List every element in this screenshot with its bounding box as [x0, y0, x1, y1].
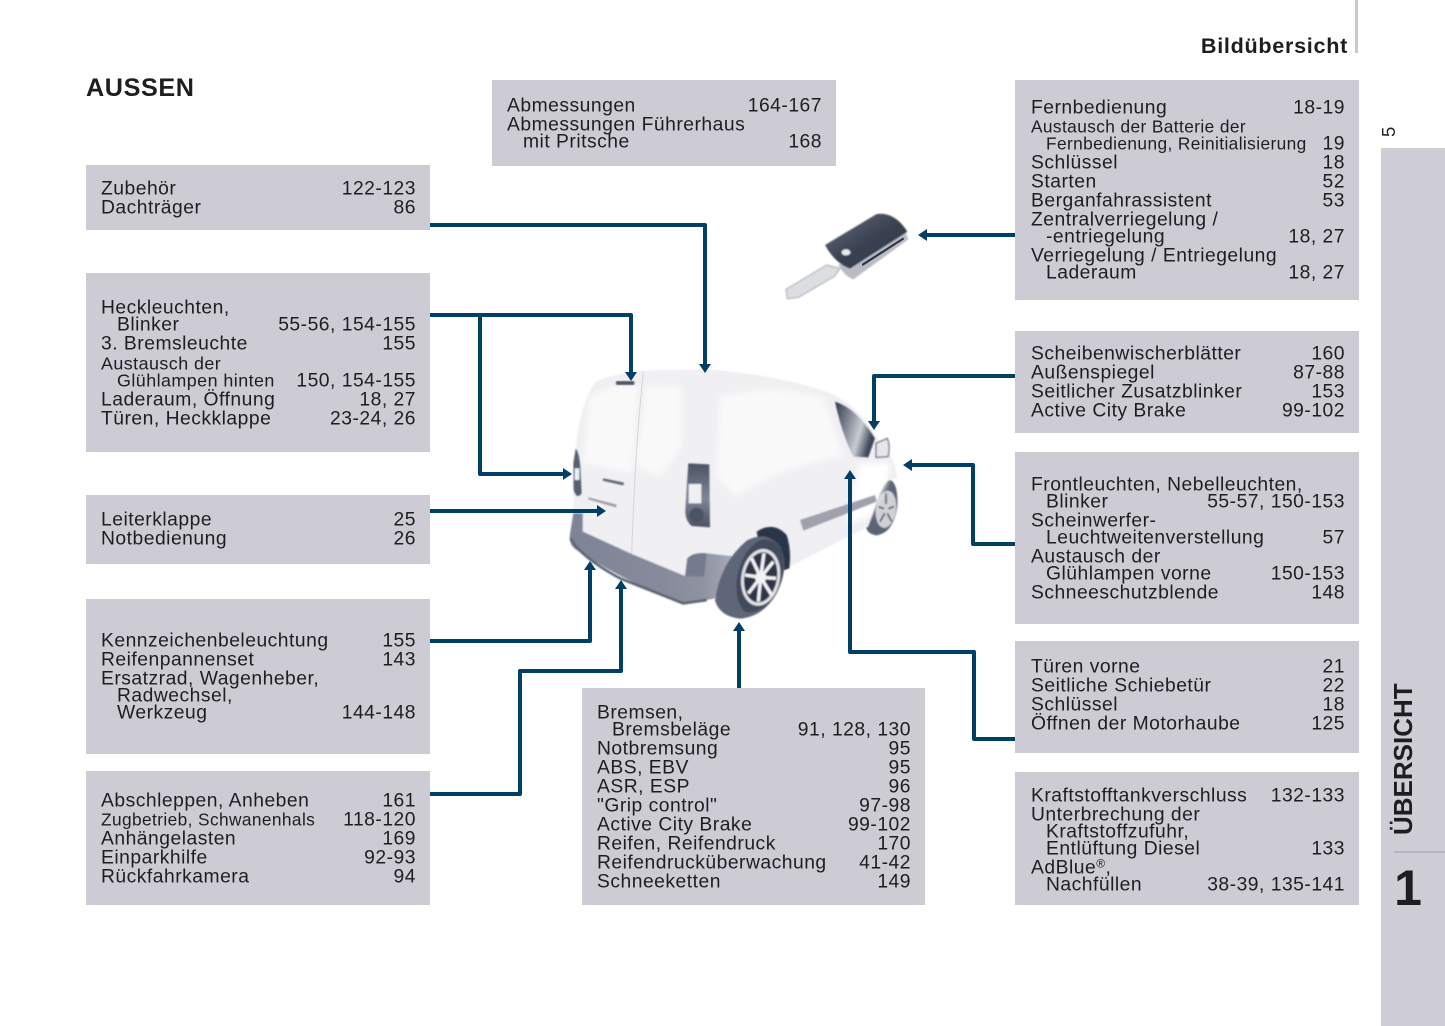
entries: Fernbedienung — [1031, 98, 1167, 119]
entries: 18, 27 — [359, 390, 416, 411]
entries: 41-42 — [859, 853, 911, 874]
entries: , — [1106, 858, 1111, 879]
entries: 150, 154-155 — [296, 371, 416, 392]
entries: "Grip control" — [597, 796, 717, 817]
entries: 18 — [1323, 153, 1345, 174]
entries: 26 — [394, 529, 416, 550]
key slot — [862, 237, 904, 266]
panel background — [86, 495, 430, 564]
entries: 86 — [394, 198, 416, 219]
tab label: ÜBERSICHT — [1388, 683, 1418, 835]
entries: Zentralverriegelung / — [1031, 210, 1218, 231]
entries: 94 — [394, 867, 416, 888]
entries: Unterbrechung der — [1031, 805, 1200, 826]
entries: 160 — [1311, 344, 1345, 365]
entries: ABS, EBV — [597, 758, 689, 779]
entries: Schneeschutzblende — [1031, 583, 1219, 604]
panel: wipers and mirrors — [1015, 331, 1359, 433]
entries: Abschleppen, Anheben — [101, 791, 309, 812]
entries: 99-102 — [848, 815, 911, 836]
entries: 3. Bremsleuchte — [101, 334, 248, 355]
key fob silver edge — [838, 232, 908, 279]
entries — [1031, 657, 1345, 735]
page number: 5 — [1378, 127, 1399, 137]
entries: 95 — [889, 758, 911, 779]
entries: 22 — [1323, 676, 1345, 697]
entries: 19 — [1323, 134, 1345, 155]
entries: Blinker — [1046, 492, 1109, 513]
entries — [101, 179, 416, 219]
entries: Kraftstofftankverschluss — [1031, 786, 1247, 807]
entries: 23-24, 26 — [330, 409, 416, 430]
panel background — [492, 80, 836, 166]
entries: Laderaum — [1046, 263, 1137, 284]
entries: Außenspiegel — [1031, 363, 1155, 384]
front wheel — [866, 479, 898, 535]
entries: Radwechsel, — [117, 686, 233, 707]
entries: Verriegelung / Entriegelung — [1031, 246, 1277, 267]
entries: 150-153 — [1271, 564, 1345, 585]
arrow: doors — [844, 470, 1015, 739]
entries: Scheinwerfer- — [1031, 511, 1156, 532]
entries: 170 — [877, 834, 911, 855]
entries — [101, 510, 416, 550]
panel: towing — [86, 771, 430, 905]
entries: 153 — [1311, 382, 1345, 403]
entries — [1031, 344, 1345, 422]
key button — [841, 249, 851, 256]
ladder flap latch — [588, 497, 617, 507]
plate light — [616, 381, 634, 385]
entries: 168 — [788, 132, 822, 153]
entries — [101, 791, 416, 888]
entries: Entlüftung Diesel — [1046, 839, 1200, 860]
entries — [101, 631, 416, 724]
entries: Fernbedienung, Reinitialisierung — [1046, 134, 1307, 154]
entries: Schneeketten — [597, 872, 721, 893]
rear left light — [573, 449, 582, 496]
entries: 155 — [382, 334, 416, 355]
chapter tab — [1381, 148, 1445, 1026]
entries: 87-88 — [1293, 363, 1345, 384]
van body — [573, 369, 897, 577]
entries: 25 — [394, 510, 416, 531]
entries: 118-120 — [343, 810, 416, 831]
entries: Abmessungen Führerhaus — [507, 115, 745, 136]
panel: ladder flap — [86, 495, 430, 564]
entries: Türen, Heckklappe — [101, 409, 271, 430]
entries: Heckleuchten, — [101, 298, 230, 319]
entries: 95 — [889, 739, 911, 760]
entries: Blinker — [117, 315, 180, 336]
entries: Schlüssel — [1031, 153, 1118, 174]
panel background — [1015, 331, 1359, 433]
entries: 144-148 — [342, 703, 416, 724]
panel background — [86, 771, 430, 905]
entries: 55-56, 154-155 — [278, 315, 416, 336]
arrow: wipers and mirrors — [868, 376, 1015, 430]
panel background — [86, 165, 430, 230]
entries: Einparkhilfe — [101, 848, 208, 869]
entries: 18, 27 — [1288, 263, 1345, 284]
entries — [101, 298, 416, 430]
arrow: rear lights to plate light and tail light — [430, 315, 637, 480]
key blade — [786, 265, 840, 299]
entries: Starten — [1031, 172, 1097, 193]
entries: Leiterklappe — [101, 510, 212, 531]
panel: accessories — [86, 165, 430, 230]
entries: Austausch der — [1031, 547, 1161, 568]
entries — [1031, 786, 1345, 896]
entries: 133 — [1311, 839, 1345, 860]
entries: Glühlampen vorne — [1046, 564, 1212, 585]
arrow: ladder flap — [430, 505, 606, 517]
entries: Zugbetrieb, Schwanenhals — [101, 810, 315, 830]
entries: Bremsbeläge — [612, 720, 731, 741]
panel background — [582, 688, 925, 905]
entries: 148 — [1311, 583, 1345, 604]
arrow: accessories to roof — [430, 225, 711, 373]
entries: 57 — [1323, 528, 1345, 549]
chapter number: 1 — [1394, 860, 1422, 916]
entries: -entriegelung — [1046, 227, 1165, 248]
entries: 97-98 — [859, 796, 911, 817]
entries: 18 — [1323, 695, 1345, 716]
entries: Dachträger — [101, 198, 201, 219]
entries: Glühlampen hinten — [117, 371, 275, 391]
entries: 143 — [382, 650, 416, 671]
entries: 52 — [1323, 172, 1345, 193]
arrow: brakes — [733, 622, 745, 688]
entries: ASR, ESP — [597, 777, 690, 798]
entries — [597, 703, 911, 893]
panel: remote control and key — [1015, 80, 1359, 300]
entries — [1031, 475, 1345, 604]
entries: Bremsen, — [597, 703, 684, 724]
header rule — [1355, 0, 1358, 53]
entries: Kennzeichenbeleuchtung — [101, 631, 329, 652]
rear wheel — [715, 527, 790, 619]
panel: rear lights — [86, 273, 430, 452]
tab background — [1381, 148, 1445, 1026]
arrow: licence plate light — [430, 561, 596, 641]
tab divider — [1394, 851, 1445, 853]
rear side light — [685, 463, 710, 527]
title: AUSSEN: AUSSEN — [86, 74, 195, 102]
entries: Reifenpannenset — [101, 650, 254, 671]
panel background — [1015, 641, 1359, 753]
entries: 38-39, 135-141 — [1207, 875, 1345, 896]
entries: Schlüssel — [1031, 695, 1118, 716]
entries: 149 — [877, 872, 911, 893]
entries: 55-57, 150-153 — [1207, 492, 1345, 513]
entries: 18, 27 — [1288, 227, 1345, 248]
panel background — [1015, 772, 1359, 905]
arrow: key — [918, 229, 1015, 241]
entries: 91, 128, 130 — [798, 720, 911, 741]
illustration: van — [570, 369, 898, 619]
key fob — [825, 214, 907, 268]
entries: Ersatzrad, Wagenheber, — [101, 669, 319, 690]
entries: Leuchtweitenverstellung — [1046, 528, 1264, 549]
entries: Laderaum, Öffnung — [101, 389, 275, 411]
entries: Reifen, Reifendruck — [597, 834, 776, 855]
wing mirror — [876, 438, 889, 457]
entries: Active City Brake — [1031, 401, 1186, 422]
entries: Scheibenwischerblätter — [1031, 344, 1241, 365]
panel background — [1015, 80, 1359, 300]
rear bumper — [570, 513, 736, 604]
entries: Notbedienung — [101, 529, 227, 550]
entries: 122-123 — [342, 179, 416, 200]
entries: 96 — [889, 777, 911, 798]
entries: Rückfahrkamera — [101, 867, 249, 888]
entries — [1031, 98, 1345, 284]
entries: Active City Brake — [597, 815, 752, 836]
rear door handle — [603, 478, 624, 485]
panel: front lights — [1015, 452, 1359, 624]
entries: 99-102 — [1282, 401, 1345, 422]
entries: 18-19 — [1293, 98, 1345, 119]
entries: Türen vorne — [1031, 657, 1140, 678]
entries: AdBlue — [1031, 858, 1096, 879]
side rubbing strip — [800, 495, 877, 531]
entries: mit Pritsche — [523, 132, 630, 153]
panel background — [1015, 452, 1359, 624]
entries: Öffnen der Motorhaube — [1031, 713, 1241, 735]
panel: fuel — [1015, 772, 1359, 905]
entries: Reifendrucküberwachung — [597, 853, 827, 874]
door seams — [632, 372, 643, 555]
illustration: key — [786, 214, 908, 299]
entries: Austausch der Batterie der — [1031, 117, 1246, 137]
page header: Bildübersicht: Bildübersicht — [1201, 33, 1348, 58]
entries: ® — [1096, 857, 1106, 871]
body highlights — [583, 385, 890, 523]
entries: Anhängelasten — [101, 829, 236, 850]
entries: Austausch der — [101, 354, 221, 374]
entries: Abmessungen — [507, 96, 636, 117]
entries: Zubehör — [101, 179, 176, 200]
entries: 161 — [382, 791, 416, 812]
entries: Kraftstoffzufuhr, — [1046, 822, 1189, 843]
panel background — [86, 599, 430, 754]
panel: licence plate light and spare wheel — [86, 599, 430, 754]
panel: doors — [1015, 641, 1359, 753]
panel: dimensions — [492, 80, 836, 166]
entries: 125 — [1311, 714, 1345, 735]
entries: Seitlicher Zusatzblinker — [1031, 382, 1242, 403]
arrow: front lights — [903, 459, 1015, 544]
entries: Frontleuchten, Nebelleuchten, — [1031, 475, 1303, 496]
entries: 21 — [1323, 657, 1345, 678]
entries: Notbremsung — [597, 739, 718, 760]
entries: 132-133 — [1271, 786, 1345, 807]
entries: 155 — [382, 631, 416, 652]
entries: 53 — [1323, 191, 1345, 212]
panel background — [86, 273, 430, 452]
entries: Werkzeug — [117, 703, 207, 724]
entries: 92-93 — [364, 848, 416, 869]
entries: 169 — [382, 829, 416, 850]
panel: brakes and tyres — [582, 688, 925, 905]
entries: Nachfüllen — [1046, 875, 1142, 896]
arrow: towing — [430, 580, 627, 794]
entries: Seitliche Schiebetür — [1031, 676, 1211, 697]
entries: Berganfahrassistent — [1031, 191, 1212, 212]
entries — [507, 96, 822, 153]
windscreen window — [835, 402, 875, 457]
entries: 164-167 — [748, 96, 822, 117]
